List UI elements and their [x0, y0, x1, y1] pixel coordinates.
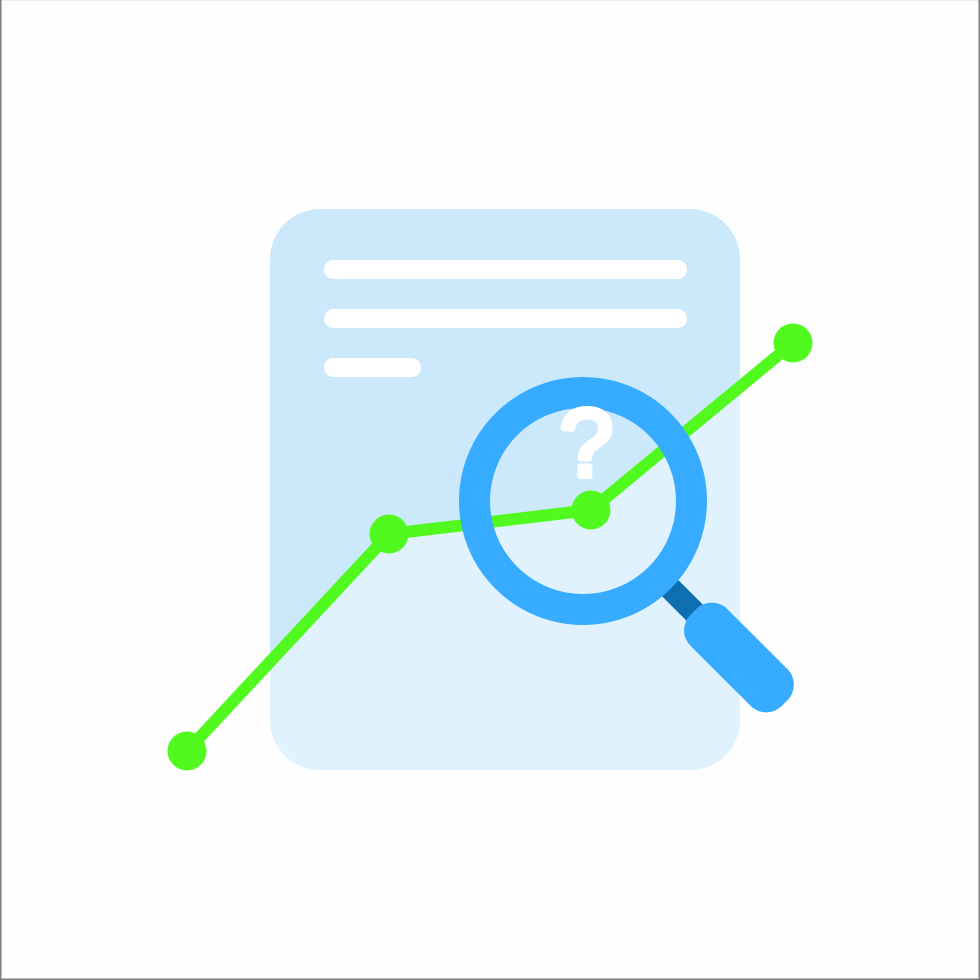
magnifier ring [474, 392, 692, 610]
lower light area of page under the line [270, 395, 740, 770]
icon: question mark: ? [560, 390, 613, 497]
line chart [168, 324, 812, 770]
icon: magnifying glass [474, 392, 803, 721]
magnifier neck [665, 583, 697, 615]
magnifier grip [675, 594, 803, 721]
text lines on the document [324, 260, 687, 377]
panel: document page [270, 209, 740, 770]
